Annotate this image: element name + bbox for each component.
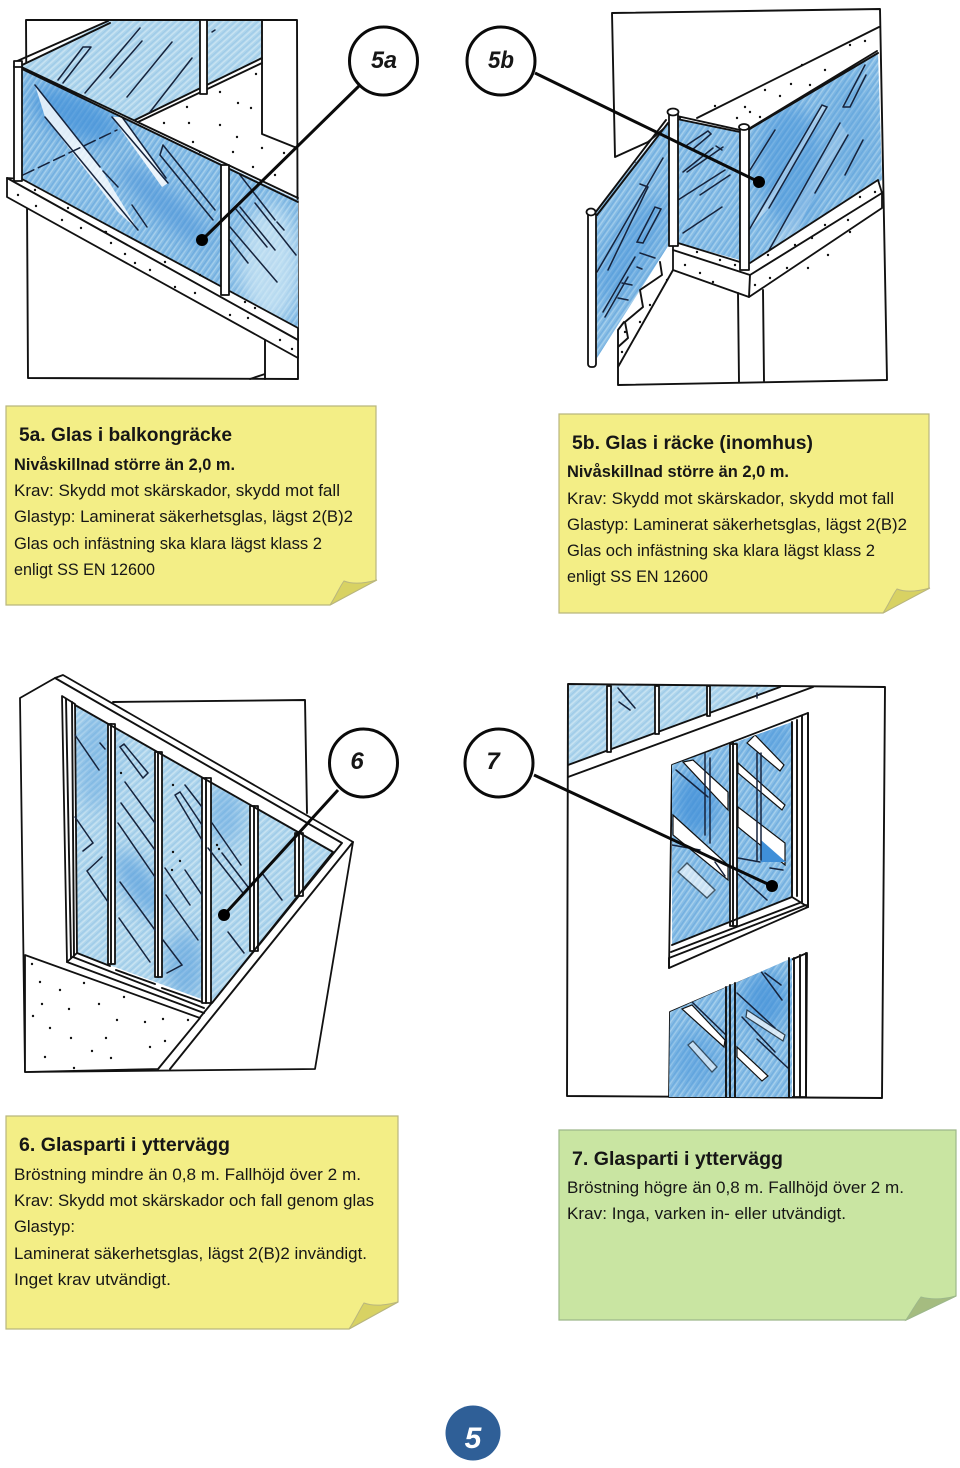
note 5b text: Krav: Skydd mot skärskador, skydd mot fall xyxy=(567,489,894,508)
posts xyxy=(588,212,596,367)
callout 5b xyxy=(467,27,765,188)
note 7 text xyxy=(567,1148,904,1223)
note 6 text: Bröstning mindre än 0,8 m. Fallhöjd över 2 m. xyxy=(14,1165,361,1184)
left panel reflections xyxy=(597,158,663,317)
note 6 text: Krav: Skydd mot skärskador och fall genom glas xyxy=(14,1191,374,1210)
illustration 6: glazed section of exterior wall, low sill xyxy=(20,675,353,1072)
reflections xyxy=(75,735,282,973)
landing slab xyxy=(673,180,882,297)
page fold xyxy=(349,1302,398,1329)
note 5b text: Nivåskillnad större än 2,0 m. xyxy=(567,462,789,481)
note 5b text: Glas och infästning ska klara lägst klass 2 xyxy=(567,541,875,560)
floor dots xyxy=(164,74,284,175)
page fold xyxy=(906,1296,956,1320)
illustration 5b: indoor glass railing xyxy=(583,9,887,385)
note 5b xyxy=(559,414,930,613)
note 6 text: 6. Glasparti i yttervägg xyxy=(19,1134,230,1156)
note 5a text: enligt SS EN 12600 xyxy=(14,560,155,579)
right panel reflections xyxy=(749,65,866,252)
front glass panel xyxy=(20,68,298,328)
note 5a text: Glas och infästning ska klara lägst klass 2 xyxy=(14,534,322,553)
lower window xyxy=(669,953,807,1097)
glass frame edges xyxy=(75,705,333,1003)
note 5b text: enligt SS EN 12600 xyxy=(567,567,708,586)
callout 6: 6 xyxy=(350,748,364,775)
note 5a text: Krav: Skydd mot skärskador, skydd mot fall xyxy=(14,481,340,500)
slab with dots xyxy=(7,178,298,358)
note 6 text xyxy=(14,1134,374,1289)
middle panel reflections xyxy=(678,131,730,233)
note 5a text xyxy=(14,424,353,579)
note 6 text: Glastyp: xyxy=(14,1217,75,1236)
page number badge xyxy=(446,1406,500,1460)
sill xyxy=(67,953,204,1013)
note 7 text: Bröstning högre än 0,8 m. Fallhöjd över 2 m. xyxy=(567,1178,904,1197)
front rail xyxy=(15,64,298,202)
page fold xyxy=(330,580,377,605)
middle glass panel xyxy=(677,118,740,260)
dotted floor xyxy=(25,955,200,1072)
stair xyxy=(618,262,673,367)
back panel reflections xyxy=(58,28,215,112)
window frame xyxy=(669,713,808,968)
back glass panel xyxy=(20,21,262,120)
note 5a xyxy=(6,406,377,605)
note 6 text: Inget krav utvändigt. xyxy=(14,1270,171,1289)
right glass panel xyxy=(748,53,882,263)
note 6 text: Laminerat säkerhetsglas, lägst 2(B)2 invändigt. xyxy=(14,1244,367,1263)
note 5a text: Glastyp: Laminerat säkerhetsglas, lägst 2(B)2 xyxy=(14,507,353,526)
front panel reflections xyxy=(35,85,296,282)
note 7 text: Krav: Inga, varken in- eller utvändigt. xyxy=(567,1204,846,1223)
note 6 xyxy=(6,1116,398,1329)
callout 5a: 5a xyxy=(371,47,397,74)
illustration 7: glazed section of exterior wall, high sill xyxy=(567,684,885,1098)
note 5b text: Glastyp: Laminerat säkerhetsglas, lägst 2(B)2 xyxy=(567,515,907,534)
note 5b text xyxy=(567,432,907,586)
left glass panel xyxy=(595,122,670,358)
callout 7 xyxy=(465,729,778,892)
upper window xyxy=(669,713,808,968)
back post xyxy=(200,20,207,94)
callout 7: 7 xyxy=(486,748,501,775)
callout 5b: 5b xyxy=(488,47,514,74)
page number badge: 5 xyxy=(465,1422,483,1455)
illustration 5a: glass balcony railing xyxy=(7,20,300,379)
note 5a text: Nivåskillnad större än 2,0 m. xyxy=(14,455,235,474)
page fold xyxy=(883,588,930,613)
note 5b text: 5b. Glas i räcke (inomhus) xyxy=(572,432,813,454)
column xyxy=(738,290,764,382)
front posts xyxy=(14,66,22,181)
upper floor xyxy=(697,27,879,118)
callout 5a xyxy=(196,27,418,246)
note 7 xyxy=(559,1130,956,1320)
note 5a text: 5a. Glas i balkongräcke xyxy=(19,424,232,446)
mullions xyxy=(62,696,303,1003)
glass xyxy=(75,705,333,1003)
callout 6 xyxy=(218,729,398,921)
note 7 text: 7. Glasparti i yttervägg xyxy=(572,1148,783,1170)
upper glass xyxy=(568,685,785,765)
